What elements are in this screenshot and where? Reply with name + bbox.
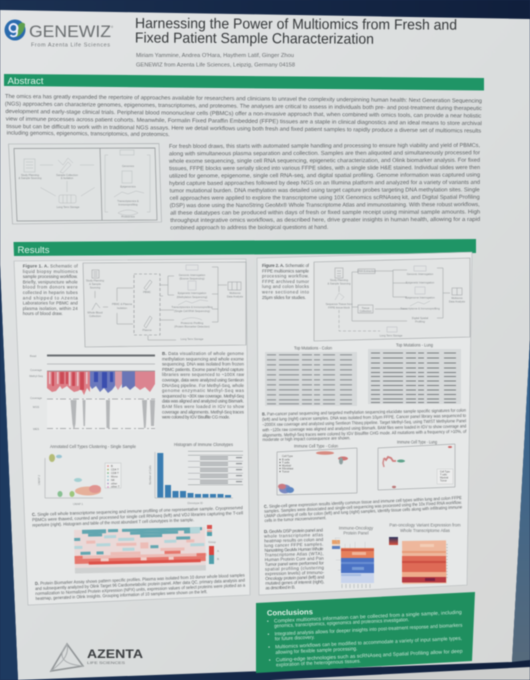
heading: conclusions: Conclusions <box>267 607 313 617</box>
text: figure 1A caption: blood from donors were <box>23 285 78 290</box>
label: sample collection: & Isolation <box>61 176 74 180</box>
chart: figure 1B genome browser tracks: WES <box>33 427 39 431</box>
schematic: figure 1A liquid biopsy workflow: Proteomic Profiling <box>181 321 204 325</box>
schematic: figure 1A liquid biopsy workflow: Genomic Interrogation <box>179 273 206 277</box>
schematic: figure 2A FFPE workflow: Data Analysis <box>449 300 466 304</box>
text: conclusion bullets: allowing for flexible sample processing. <box>275 646 358 656</box>
abstract text <box>5 94 482 141</box>
title: Fixed Patient Sample Characterization <box>135 30 374 48</box>
text: conclusion bullets <box>267 610 464 669</box>
text: figure 2A caption: processing workflow. <box>262 274 309 279</box>
schematic: figure 2A FFPE workflow: Collection <box>360 309 372 313</box>
text: figure 2A caption: lung and colon blocks <box>262 284 310 289</box>
text: conclusion bullets: Integrated analysis allows for deeper insights into post-treatment response and biomarkers <box>274 623 463 637</box>
text: figure 2B caption: moderate or high impact consequence are shown. <box>262 435 351 442</box>
text: figure 1B caption: genome enzymatic Methyl-Seq was <box>162 388 245 393</box>
label: study planning: & Sample Sourcing <box>18 176 42 180</box>
methods paragraph: throughput integrative omics workflows, as described here, drive greater insights in human health, allowing for a rapid <box>170 217 480 224</box>
chart: immune cell type colon: Tumor <box>282 470 290 474</box>
table: top mutations lung <box>368 342 461 404</box>
text: figure 2D caption: Oncology protein panel (left) and <box>265 574 325 581</box>
text: figure 1A caption: plasma isolation, within 24 <box>23 306 78 311</box>
schematic: figure 2A FFPE workflow: Genomic Interrogation <box>407 272 434 276</box>
schematic: figure 1A liquid biopsy workflow: Epigenetic Interrogation <box>178 291 207 295</box>
legend: heatmap groups <box>207 525 219 564</box>
text: figure 2D caption: Transcriptome Atlas (WTA), <box>265 551 324 557</box>
schematic: figure 1A liquid biopsy workflow: Transcriptomics & Immunoprofiling <box>171 305 213 309</box>
abstract text: development and early-stage clinical trials. Peripheral blood mononuclear cells (PBMCs) offer a non-invasive approach that, when combined with omics tools, can provide a near holistic <box>5 109 482 120</box>
chart: figure 1B genome browser tracks: Methyl-Seq <box>29 374 43 378</box>
text: conclusion bullets: Complex multiomics information can be collected from a single sample, including <box>274 610 462 624</box>
schematic: figure 2A FFPE workflow: Sequence Tissue from <box>326 302 353 306</box>
label: study planning: Study Planning <box>21 173 40 177</box>
text: figure 2D caption: D. GeoMx DSP protein panel and <box>264 527 324 534</box>
schematic: figure 2A FFPE workflow: Epigenome Interrogation <box>405 296 435 300</box>
table: top mutations colon <box>265 346 357 406</box>
label: omics outputs: Epigenomics <box>120 184 136 188</box>
text: figure 2D caption: lung cancer FFPE samples. <box>264 542 323 548</box>
schematic: figure 1A liquid biopsy workflow: Multiomic <box>229 291 241 295</box>
text: figure 2D caption: heatmap results on colon and <box>264 537 324 543</box>
icon: study planning <box>24 159 35 172</box>
label: long term storage: Long Term Storage <box>57 205 80 209</box>
label: sample collection <box>56 173 78 180</box>
text: figure 1C caption <box>32 505 244 528</box>
abstract text: including genomics, epigenomics, transcriptomics, and proteomics. <box>7 131 170 138</box>
heading: Abstract: Abstract <box>8 76 44 86</box>
abstract text: view of immune processes across patient cohorts. Meanwhile, Formalin Fixed Paraffin Embedded (FFPE) tissues are a staple in clinical diagnostics and an ideal means to store archival <box>6 117 482 127</box>
text: conclusion bullets: • <box>267 632 270 638</box>
text: figure 1D caption <box>35 573 246 601</box>
schematic: figure 2A FFPE workflow: Multiomic <box>451 296 463 300</box>
schematic: figure 2A FFPE workflow <box>314 258 470 341</box>
chart: histogram of immune clonotypes: Histogram of Immune Clonotypes <box>174 442 233 447</box>
text: figure 1B caption: coverage, data were analyzed using Sentieon <box>162 378 245 382</box>
chart: annotated cell types clustering: Annotated Cell Types Clustering - Single Sample <box>50 444 137 449</box>
text: figure 1B caption: sequencing. DNA was isolated from frozen <box>162 362 245 367</box>
text: figure 1A caption: Figure 1. A. Schematic of <box>23 264 78 268</box>
text: conclusion bullets: exploration of the heterogenous tissues. <box>276 658 361 668</box>
chart: annotated cell types clustering: Mono <box>111 474 118 478</box>
abstract text: (NGS) approaches can characterize genomes, epigenomes, transcriptomes, and proteomes. The analyses are critical to assess in individuals both pre- and post-treatment during therapeutic <box>5 101 482 112</box>
chart: annotated cell types clustering: other <box>111 482 117 486</box>
schematic: figure 2A FFPE workflow: Long Term Storage <box>380 334 403 338</box>
chart: immune cell type colon: Fibroblast <box>282 466 294 470</box>
text: figure 1B caption: libraries were sequenced to ~100X raw <box>162 372 245 377</box>
methods paragraph: combined approach to address the biological questions at hand. <box>170 225 329 231</box>
logo: GENEWIZ <box>4 20 114 48</box>
text: figure 1A caption: sample processing workflow. <box>23 274 78 279</box>
text: conclusion bullets: • <box>269 658 271 664</box>
text: figure 1B caption: were colored by IGV Bisulfite CG mode. <box>162 415 230 420</box>
text: figure 2A caption: were sectioned into <box>262 290 310 294</box>
schematic: figure 1A liquid biopsy workflow: Collection <box>89 314 101 318</box>
schematic: figure 1A liquid biopsy workflow: PBMC & Plasma <box>112 302 133 306</box>
schematic: figure 1A liquid biopsy workflow: Data Analysis <box>227 294 244 298</box>
text: figure 2A caption: 25μm slides for studies. <box>262 295 306 300</box>
chart: immune cell type colon: Myeloid <box>282 464 291 468</box>
text: figure 2D caption: as described in B. <box>265 585 295 590</box>
panel: figure 1 <box>14 259 250 605</box>
chart: annotated cell types clustering: B <box>111 464 113 468</box>
chart: immune cell type colon: B cells <box>282 458 290 462</box>
schematic: figure 2A FFPE workflow: Tissue <box>362 306 370 310</box>
chart: pan-oncology variant expression heatmap: Whole Transcriptome Atlas <box>400 528 450 533</box>
schematic: figure 2A FFPE workflow: DNA Extraction <box>357 269 376 273</box>
schematic: figure 1A liquid biopsy workflow: (Methylation Sequencing) <box>177 295 207 299</box>
chart: figure 1B genome browser tracks: Coverage <box>30 396 42 400</box>
label: sample collection: Sample Collection <box>56 173 78 177</box>
icon: long term storage <box>59 195 76 203</box>
text: conclusion bullets: • <box>267 619 269 625</box>
text: figure 1A caption: liquid biopsy multiomics <box>23 269 78 274</box>
logo: GENEWIZ: ® <box>111 25 114 29</box>
text: figure 2C caption: cells in the tumor microenvironment. <box>264 515 327 523</box>
schematic: figure 1A liquid biopsy workflow: (Protein Biomarker Detection) <box>174 324 210 328</box>
text: figure 2C caption: C. Single-cell gene expression results identify common tissue and immune cell types within lung and colon FFPE <box>264 495 462 509</box>
chart: protein biomarker heatmap <box>74 527 207 573</box>
chart: immune cell type colon: Immune Cell Type - Colon <box>294 444 339 448</box>
text: figure 2D caption: mutated genes of interest (right), <box>265 579 324 586</box>
schematic: figure 2A FFPE workflow: Digital Spatial <box>412 316 429 320</box>
arrows: abstract workflow <box>40 165 95 196</box>
methods paragraph: tumor mutational burden. DNA methylation was detailed using target capture probes targeting DNA methylation sites. Single <box>170 187 480 194</box>
authors and affiliation: Miriam Yammine, Andrea O'Hara, Haythem Latif, Ginger Zhou <box>136 53 294 59</box>
heading: Results: Results <box>18 245 50 255</box>
text: figure 1B caption: PBMC patients. Exome panel hybrid capture <box>162 367 245 372</box>
text: figure 1B caption: coverage and alignments. Methyl-Seq traces <box>162 409 245 414</box>
methods paragraph: tissues, FFPE blocks were serially sliced into various FFPE slides, with a single slide H&E stained. Individual slides were then <box>169 165 480 172</box>
text: figure 1B caption: B. Data visualization of whole genome <box>162 351 245 356</box>
text: conclusion bullets: • <box>268 645 270 651</box>
panel: figure 2 <box>257 252 472 595</box>
text: figure 1B caption: methylation sequencing and whole exome <box>162 356 245 361</box>
schematic: figure 1A liquid biopsy workflow: Study Planning <box>86 278 105 282</box>
chart: annotated cell types clustering: UMAP 2 <box>37 475 41 485</box>
schematic: figure 1A liquid biopsy workflow: Whole Blood <box>87 310 103 314</box>
chart: annotated cell types clustering: CD8 T <box>111 471 119 475</box>
text: figure 1A caption: and shipped to Azenta <box>23 295 78 300</box>
chart: histogram of immune clonotypes: Clonotype ID <box>187 501 203 505</box>
chart: immune cell type lung: Immune Cell Type - Lung <box>397 440 438 444</box>
text: figure 1A caption: collected in heparin tubes <box>23 290 78 295</box>
text: figure 2B caption: ~2000X raw coverage and analyzed using Sentieon TNseq pipeline. Target Methyl-Seq, using TWIST Methylome Panel <box>262 418 466 427</box>
text: figure 2D caption: spatial profiling (clustering <box>265 565 325 572</box>
chart: histogram of immune clonotypes: Number of Cells <box>148 465 152 485</box>
logo: Azenta Life Sciences: AZENTA <box>87 649 143 661</box>
chart: pan-oncology variant expression heatmap <box>389 522 461 584</box>
chart: annotated cell types clustering: UMAP 1 <box>73 502 83 506</box>
schematic: figure 2A FFPE workflow: FFPE tissue block <box>328 306 350 310</box>
text: figure 2A caption: FFPE archived tumor <box>262 279 310 284</box>
label: study planning <box>18 173 42 180</box>
logo: Azenta Life Sciences: LIFE SCIENCES <box>87 660 125 665</box>
chart: figure 1B genome browser tracks: Read <box>30 354 37 358</box>
label: omics outputs: Transcriptomics & <box>117 199 139 203</box>
text: figure 1C caption: PBMCs were thawed, counted and processed for single cell RNAseq (left) and VDJ libraries capturing the T-cell <box>32 510 243 522</box>
schematic: figure 1A liquid biopsy workflow: Isolation <box>117 306 128 310</box>
abstract schematic panel <box>8 144 162 224</box>
text: figure 2A caption <box>262 263 310 300</box>
methods paragraph: (DSP) was done using the NanoString GeoMx® Whole Transcriptome Atlas and immunostaining. With these robust workflows, <box>170 201 480 209</box>
bracket: omics outputs <box>105 150 150 215</box>
text: figure 1B caption: data was aligned and analyzed using Bismark. <box>162 399 244 404</box>
label: omics outputs: Immunoprofiling <box>118 202 138 206</box>
schematic: figure 1A liquid biopsy workflow: Long Term Storage <box>181 337 204 341</box>
text: conclusion bullets: Cutting-edge technologies such as scRNAseq and Spatial Profiling allow for deep <box>276 649 463 663</box>
logo: Azenta Life Sciences <box>51 644 143 671</box>
text: figure 2B caption <box>262 408 467 442</box>
text: figure 1D caption: heatmap, generated in Olink Insights. Grouping information of 10 samples were shown on the left. <box>35 589 208 601</box>
table: top clonotypes <box>188 451 243 485</box>
text: figure 2B caption: (left) and lung (right) cancer samples. DNA was isolated from 10μm FFPE. Cancer panel library was sequenced to <box>262 413 467 422</box>
schematic: figure 2A FFPE workflow: Transcriptome & Immunoprofiling <box>400 306 440 310</box>
methods paragraph <box>168 143 481 231</box>
schematic: figure 2A FFPE workflow: Epigenetic Interrogation <box>406 280 435 284</box>
title <box>135 16 457 48</box>
text: figure 2B caption: with ~120x raw coverage was aligned and analyzed using Bismark. BAM files were loaded in IGV to show coverage and <box>262 423 467 432</box>
schematic: figure 2A FFPE workflow: Profiling <box>415 320 425 324</box>
schematic: figure 1A liquid biopsy workflow: PBMC <box>143 290 151 294</box>
legend: heatmap groups: B <box>217 557 219 561</box>
chart: immune-oncology protein panel heatmap: Protein Panel <box>343 530 369 536</box>
schematic: figure 1A liquid biopsy workflow: (Exome Sequencing) <box>179 276 205 280</box>
chart: immune-oncology protein panel heatmap: Immune-Oncology <box>339 526 374 530</box>
logo: GENEWIZ: From Azenta Life Sciences <box>31 42 110 48</box>
text: figure 1B caption: sequenced to ~30X raw coverage. Methyl-Seq <box>162 393 245 398</box>
chart: annotated cell types clustering: CD4 T <box>111 468 119 472</box>
authors and affiliation <box>136 53 295 68</box>
text: figure 2D caption: Nanostring GeoMx Human Whole <box>264 546 324 553</box>
abstract text: tissue but can be difficult to work with in traditional NGS assays. Here we detail workflows using both fresh and fixed patient samples to rapidly produce a diverse set of multiomics results <box>6 124 481 135</box>
schematic: figure 1A liquid biopsy workflow: (Single Cell RNA Sequencing) <box>174 309 210 313</box>
legend: heatmap groups: Group <box>208 540 216 544</box>
text: figure 2C caption: UMAP clustering of cells for colon (left) and lung (right) samples, identify tissue cells along with infiltrating immune <box>264 504 463 518</box>
schematic: figure 1A liquid biopsy workflow: Sourcing <box>90 286 101 290</box>
text: figure 1A caption <box>23 264 78 316</box>
text: figure 2C caption <box>264 495 463 523</box>
text: figure 2B caption: alignments. Methyl-Seq traces were colored by IGV Bisulfite CHG mode. All mutations with a frequency of >10%, of <box>262 429 467 438</box>
heading: Results <box>14 239 476 256</box>
text: figure 2A caption: FFPE multiomics sample <box>262 268 310 273</box>
text: figure 2D caption <box>264 527 325 590</box>
methods paragraph: utilized for genome, epigenome, single cell RNA-seq, and digital spatial profiling. Genome information was captured using <box>169 173 480 180</box>
icon: sample collection <box>58 158 73 173</box>
chart: annotated cell types clustering: NK <box>111 478 115 482</box>
chart: annotated cell types clustering <box>37 444 137 506</box>
text: figure 2A caption: Figure 2. A. Schematic of <box>262 263 310 268</box>
authors and affiliation: GENEWIZ from Azenta Life Sciences, Leipzig, Germany 04158 <box>136 62 295 68</box>
text: figure 1D caption: D. Protein Biomarker Assay shows pattern specific profiles. Plasma was isolated from 10 donor whole blood samples <box>35 573 246 586</box>
text: figure 2D caption: Tumor panel were performed for <box>265 560 324 567</box>
text: figure 2B caption: B. Pan-cancer panel sequencing and targeted methylation sequencing elucidate sample specific signatures for colon <box>262 408 466 416</box>
text: figure 1A caption: Briefly, venipuncture whole <box>23 279 78 284</box>
chart: immune cell type colon: Cell Type <box>282 454 293 458</box>
text: conclusion bullets: genomics, transcriptomics, epigenomics and proteomics investigation. <box>274 617 409 629</box>
text: figure 2D caption: Human Protein Core and Pan <box>265 556 324 562</box>
table: top mutations lung: Top Mutations - Lung <box>396 342 434 348</box>
methods paragraph: all these datatypes can be produced within days of fresh or fixed sample receipt using minimal sample amounts. High <box>170 210 480 217</box>
schematic: figure 2A FFPE workflow: & Sample Sourcing <box>327 282 351 286</box>
schematic: figure 2A FFPE workflow: Study Planning <box>330 278 349 282</box>
chart: immune-oncology protein panel heatmap <box>332 526 374 588</box>
methods paragraph: hybrid capture based approaches followed by deep NGS on an Illumina platform and analyzed for a variety of variants and <box>169 180 480 187</box>
schematic: figure 1A liquid biopsy workflow: Plasma <box>143 328 152 332</box>
label: omics outputs: Proteomics <box>121 214 135 218</box>
label: omics outputs <box>117 164 139 218</box>
heading: Abstract <box>4 74 484 90</box>
chart: figure 1B genome browser tracks: Coverage <box>30 368 42 372</box>
chart: immune cell type lung: Cell Type <box>440 470 451 474</box>
text: figure 1A caption: Laboratories for PBMC and <box>23 301 78 306</box>
chart: immune cell type lung: Myeloid <box>440 476 449 480</box>
table: top mutations colon: Top Mutations - Colon <box>294 346 333 350</box>
methods paragraph: cell approaches were applied to explore the transcriptome using 10X Genomics scRNAseq kit, and Digital Spatial Profiling <box>170 195 480 202</box>
chart: pan-oncology variant expression heatmap: Pan-oncology Variant Expression from <box>389 522 461 528</box>
text: conclusion bullets: Multiomics workflows can be modified to accommodate a variety of input sample types, <box>275 636 462 650</box>
text: figure 1B caption <box>162 351 245 420</box>
methods paragraph: whole exome sequencing, single cell RNA sequencing, epigenetic characterization, and Olink biomarker analysis. For fixed <box>168 158 480 165</box>
chart: immune cell type colon <box>277 444 357 495</box>
text: figure 1C caption: repertoire (right). Histogram and table of the most abundant T cell clonotypes in the sample. <box>32 517 194 528</box>
schematic: figure 1A liquid biopsy workflow <box>83 262 246 347</box>
schematic: figure 1A liquid biopsy workflow: & Sample <box>89 282 101 286</box>
chart: annotated cell types clustering: other T <box>111 484 120 488</box>
methods paragraph: along with simultaneous plasma separation and collection. Samples are then aliquoted and simultaneously processed for <box>169 150 480 157</box>
chart: figure 1B genome browser tracks <box>29 354 155 431</box>
chart: immune cell type lung: T cells <box>440 474 448 476</box>
abstract text: The omics era has greatly expanded the repertoire of approaches available for researchers and clinicians to unravel the complexity underpinning human health: Next Generation Sequencing <box>5 94 482 105</box>
text: figure 1A caption: hours of blood draw. <box>23 311 63 316</box>
text: figure 2D caption: expression levels) of Immuno- <box>265 570 325 576</box>
chart: histogram of immune clonotypes <box>148 442 243 505</box>
logo: GENEWIZ: GENEWIZ <box>29 22 111 41</box>
text: figure 1B caption: DNASeq pipeline. For Methyl-Seq, whole <box>162 383 245 388</box>
chart: immune cell type lung: Tumor <box>440 480 447 482</box>
text: figure 1D caption: and subsequently analyzed by Olink Target 96 Cardiometabolic protein panel. After data QC, primary data analysis and <box>35 578 246 591</box>
chart: immune cell type lung <box>378 440 455 490</box>
panel: conclusions <box>256 592 475 673</box>
text: figure 2C caption: samples. Samples were dissociated and single-cell sequencing was processed using the 10x Fixed RNA workflow. <box>264 500 462 514</box>
chart: immune cell type colon: T cells <box>282 460 290 464</box>
legend: heatmap groups: A <box>217 549 219 553</box>
text: figure 1D caption: normalization to Normalized Protein eXpression (NPX) units, expression values of select proteins were plotted as a <box>35 583 246 596</box>
text: figure 1C caption: C. Single cell whole transcriptome sequencing and immune profiling of one representative sample. Cryopreserved <box>32 505 243 517</box>
text: figure 1B caption: BAM files were loaded in IGV to show <box>162 404 245 409</box>
label: omics outputs: Genomics <box>122 164 135 168</box>
text: conclusion bullets: for future discovery. <box>275 635 315 642</box>
chart: figure 1B genome browser tracks: WGS <box>33 405 39 409</box>
title: Harnessing the Power of Multiomics from Fresh and <box>135 16 457 34</box>
text: figure 2D caption: whole transcriptome atlas <box>264 532 324 539</box>
methods paragraph: For fresh blood draws, this starts with automated sample handling and processing to ensure high viability and yield of PBMCs, <box>169 143 480 150</box>
